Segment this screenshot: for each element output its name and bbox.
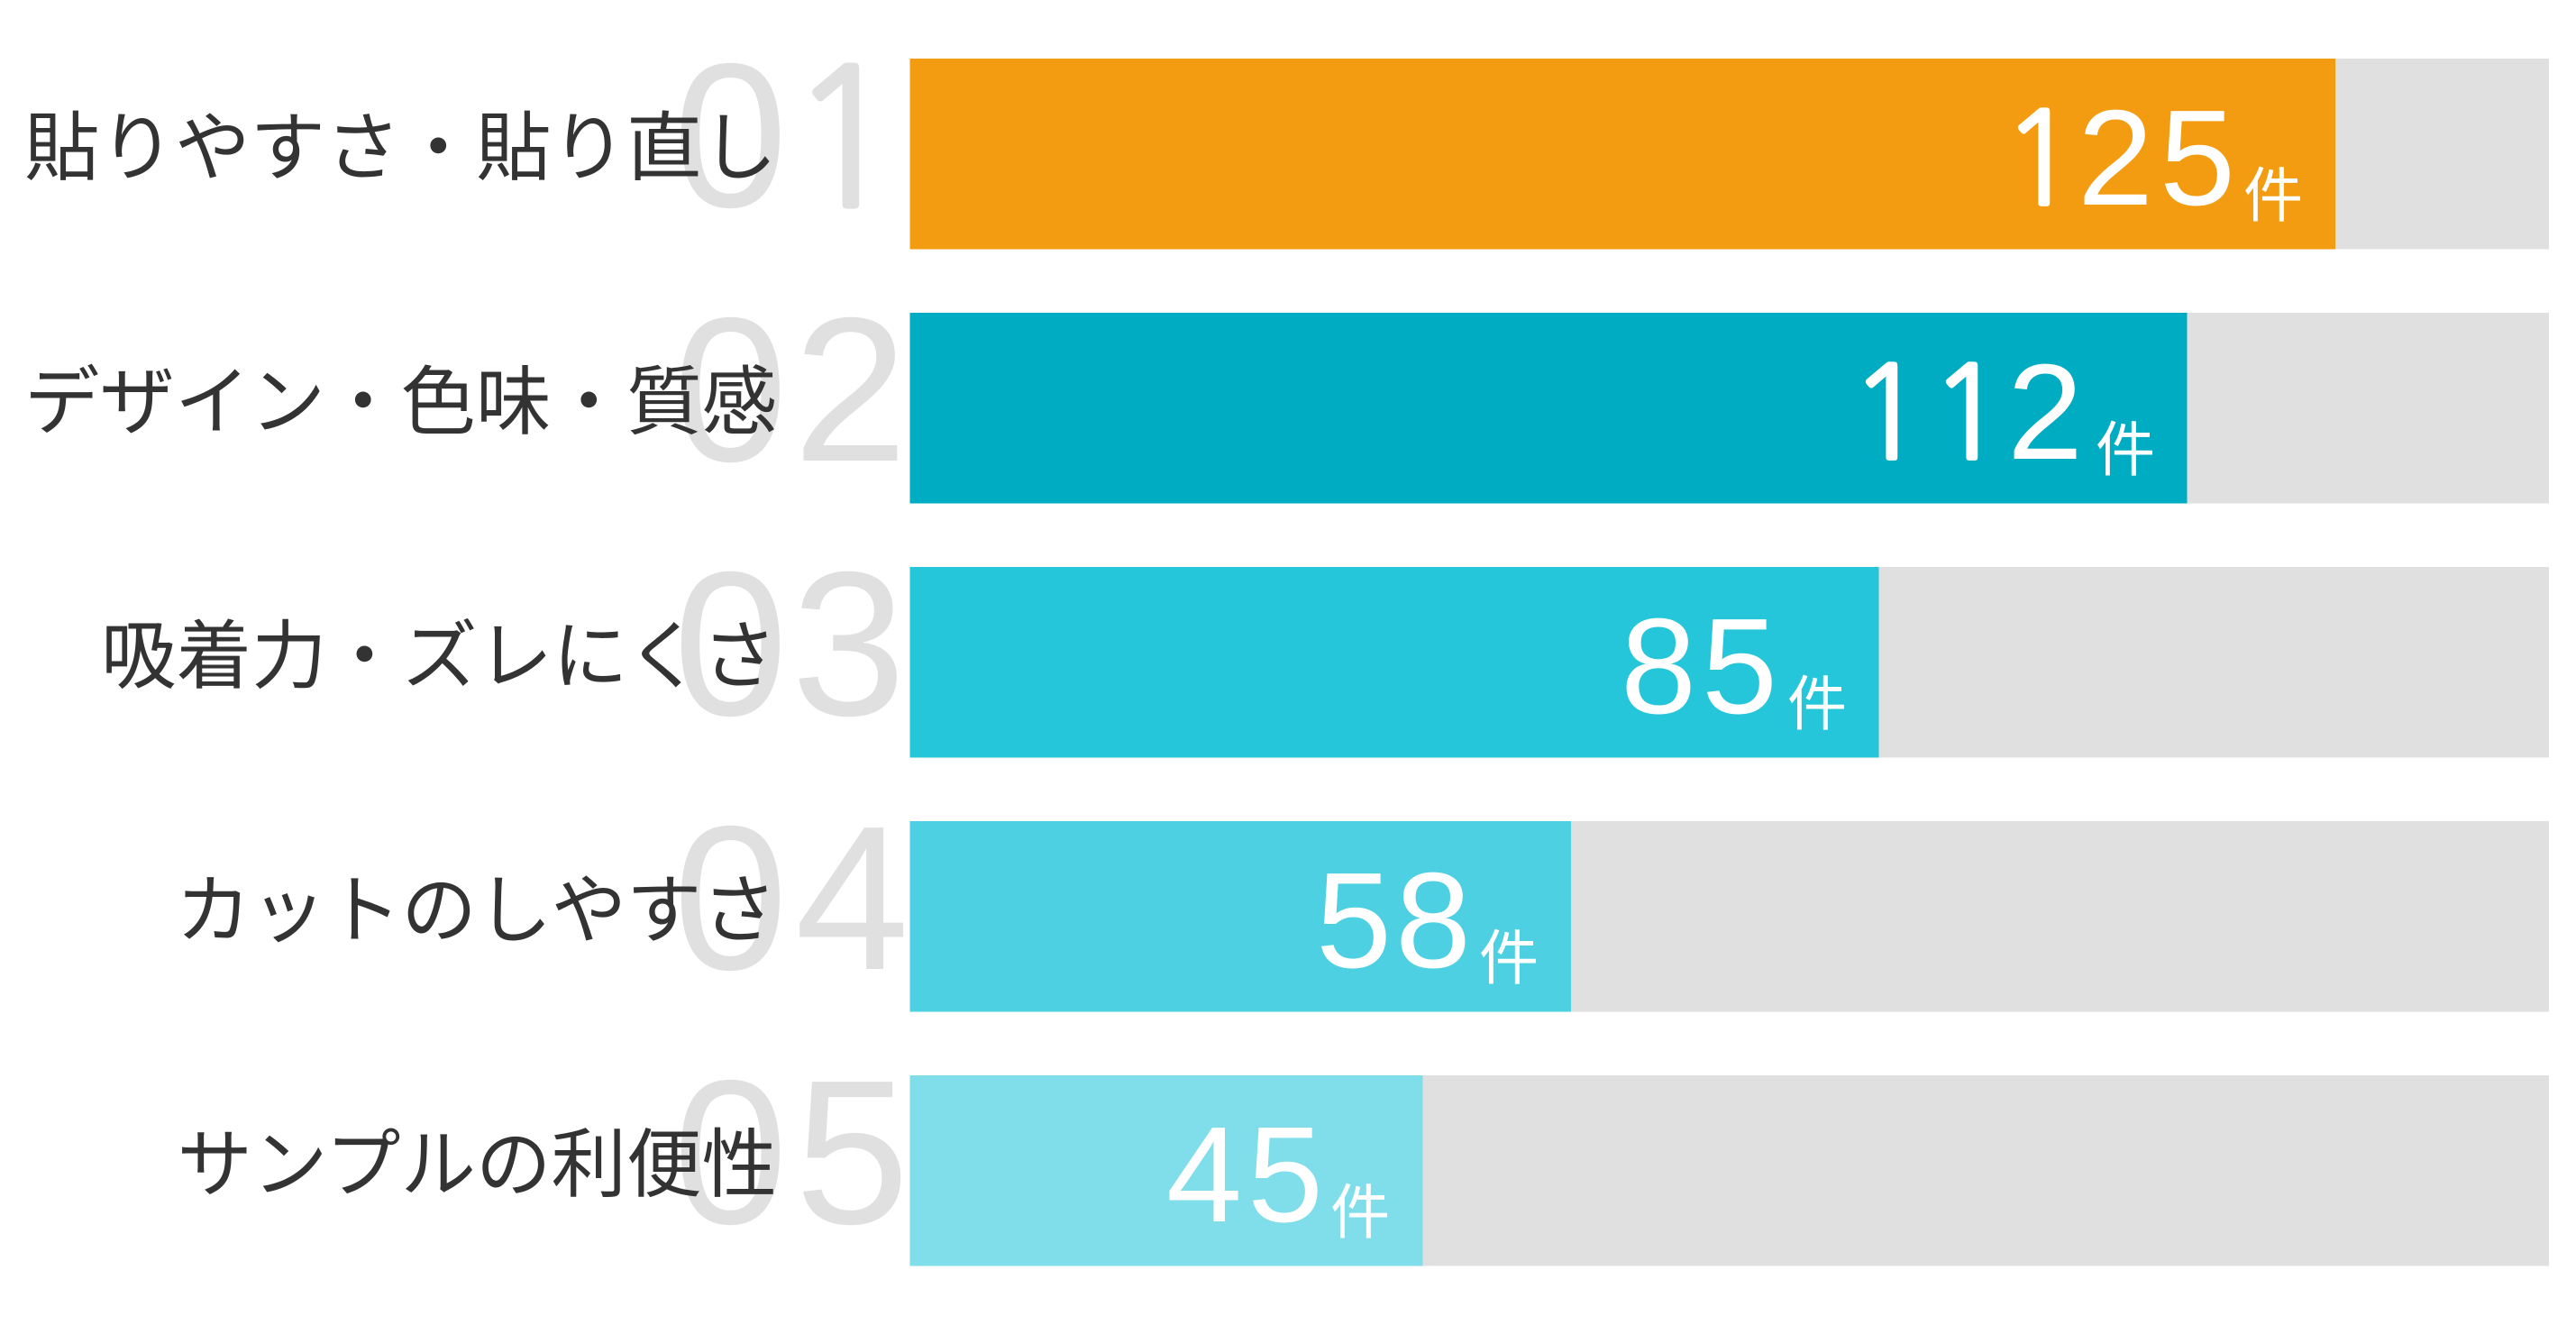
rank number 05: 05 <box>673 1038 909 1267</box>
unit: 件 <box>1479 925 1539 991</box>
label: 吸着力・ズレにくさ <box>101 614 777 699</box>
row 01: 貼りやすさ・貼り直し <box>24 22 2549 251</box>
bar 58 <box>910 821 1571 1011</box>
row 04: カットのしやすさ <box>176 784 2549 1013</box>
value 125: 1 <box>2001 95 2079 224</box>
track <box>910 567 2549 757</box>
rank number 01: 0 <box>673 22 788 251</box>
value 125: 5 <box>2160 81 2235 233</box>
label: カットのしやすさ <box>176 868 777 953</box>
track <box>910 821 2549 1011</box>
bar 125 <box>910 59 2335 249</box>
row 05: サンプルの利便性 <box>177 1038 2549 1267</box>
track <box>910 59 2549 249</box>
value 58: 58 <box>1316 844 1471 996</box>
rank number 03: 03 <box>673 530 906 759</box>
track <box>910 313 2549 503</box>
row 03: 吸着力・ズレにくさ <box>101 530 2549 759</box>
rank number 04: 04 <box>673 784 909 1013</box>
unit: 件 <box>1330 1179 1390 1246</box>
unit: 件 <box>2096 416 2155 483</box>
value 112: 1 <box>1849 349 1927 478</box>
unit: 件 <box>1787 671 1847 737</box>
row 02: デザイン・色味・質感 <box>24 276 2549 505</box>
value 85: 85 <box>1621 589 1777 742</box>
label: デザイン・色味・質感 <box>24 360 777 444</box>
label: 貼りやすさ・貼り直し <box>24 105 777 190</box>
rank number 02: 02 <box>673 276 908 505</box>
value 112: 1 <box>1929 349 2007 478</box>
value 45: 45 <box>1166 1098 1323 1250</box>
bar 85 <box>910 567 1878 757</box>
bar 45 <box>910 1075 1422 1266</box>
value 112: 2 <box>2007 335 2083 488</box>
value 125: 2 <box>2078 81 2153 233</box>
rank number 01: 1 <box>787 43 902 234</box>
unit: 件 <box>2243 162 2303 229</box>
label: サンプルの利便性 <box>177 1122 777 1207</box>
bar 112 <box>910 313 2187 503</box>
track <box>910 1075 2549 1266</box>
